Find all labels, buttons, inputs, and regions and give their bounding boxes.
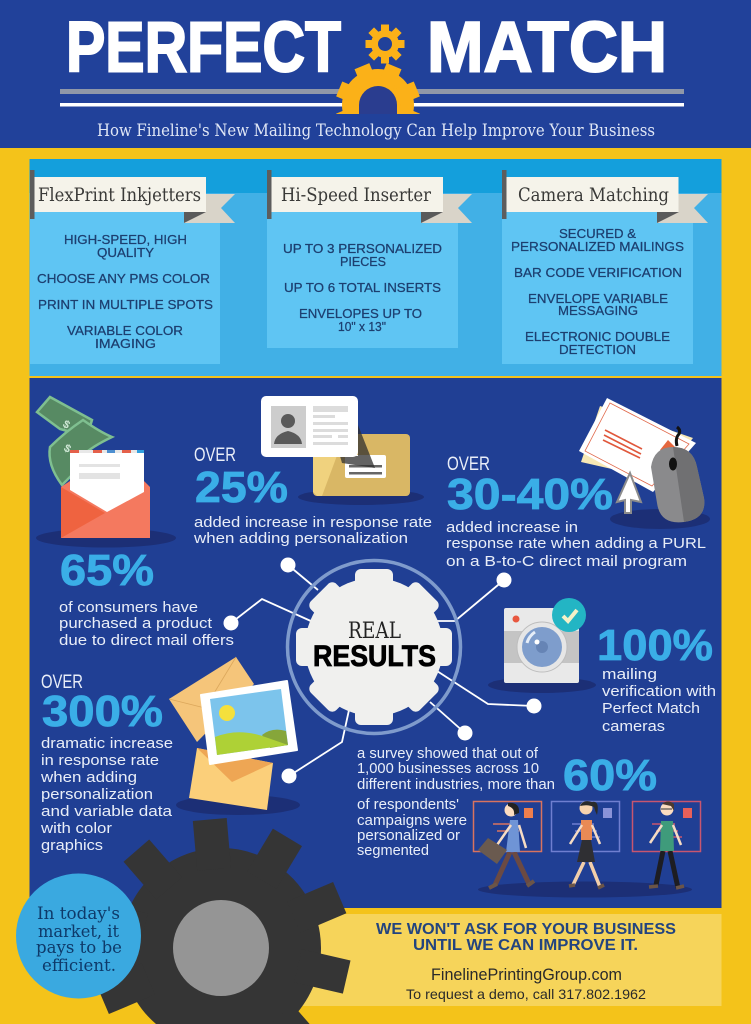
- stat: 30-40%: OVER: [447, 454, 490, 475]
- panel: Hi-Speed Inserter: 10" x 13": [338, 320, 386, 334]
- panel: Camera Matching: Camera Matching: [518, 185, 669, 206]
- central gear: real results: [288, 560, 460, 734]
- stat: 65%: [59, 546, 234, 649]
- stat: 65%: due to direct mail offers: [59, 632, 234, 649]
- panel: Hi-Speed Inserter: UP TO 6 TOTAL INSERTS: [284, 281, 441, 295]
- stat: 60% survey: different industries, more than: [357, 776, 555, 793]
- panel: FlexPrint Inkjetters: CHOOSE ANY PMS COLOR: [37, 272, 210, 286]
- stat: 30-40%: response rate when adding a PURL: [446, 535, 706, 552]
- stat: 60% survey: [357, 745, 657, 859]
- figure: man with glasses: [649, 802, 684, 888]
- figure: man with briefcase: [478, 803, 534, 888]
- stat: 60% survey: personalized or: [357, 827, 460, 844]
- callout: in today's market: pays to be: [36, 938, 122, 958]
- stat: 60% survey: 1,000 businesses across 10: [357, 760, 539, 777]
- panel: FlexPrint Inkjetters: IMAGING: [95, 337, 156, 351]
- stat: 60% survey: 60%: [563, 751, 657, 800]
- callout: call to action: To request a demo, call 317.802.1962: [406, 986, 646, 1002]
- figure: woman: [569, 801, 604, 888]
- stat: 25%: added increase in response rate: [194, 514, 432, 531]
- stat: 100%: cameras: [602, 718, 665, 735]
- stat: 300%: when adding: [40, 769, 137, 786]
- icon: personalized card and envelope: [261, 396, 424, 505]
- central gear: real results: RESULTS: [313, 640, 436, 673]
- callout: call to action: [300, 914, 722, 1006]
- stat: 60% survey: segmented: [357, 842, 429, 859]
- panel: Camera Matching: BAR CODE VERIFICATION: [514, 266, 682, 280]
- panel: real results: [30, 378, 722, 908]
- stat: 30-40%: 30-40%: [447, 470, 613, 519]
- panel: equipment: [30, 159, 722, 376]
- stat: 25%: when adding personalization: [193, 530, 408, 547]
- stat: 300%: in response rate: [41, 752, 159, 769]
- panel: Camera Matching: DETECTION: [559, 343, 636, 357]
- stat: 25%: OVER: [194, 445, 236, 466]
- stat: 300%: 300%: [42, 687, 163, 736]
- panel: Hi-Speed Inserter: UP TO 3 PERSONALIZED: [283, 242, 442, 256]
- illustration: three walking people: [474, 801, 700, 898]
- panel: Camera Matching: [502, 170, 708, 364]
- panel: Camera Matching: PERSONALIZED MAILINGS: [511, 240, 684, 254]
- stat: 100%: 100%: [597, 621, 713, 670]
- stat: 300%: graphics: [41, 837, 103, 854]
- icon: mailers and computer mouse: [579, 398, 710, 529]
- stat: 100%: Perfect Match: [602, 700, 700, 717]
- panel: Hi-Speed Inserter: PIECES: [340, 255, 386, 269]
- icon: large dark gear: [91, 818, 351, 1024]
- icon: envelopes and photo: [169, 657, 300, 815]
- stat: 25%: [193, 445, 432, 547]
- stat: 300%: and variable data: [41, 803, 173, 820]
- stat: 65%: 65%: [60, 546, 154, 595]
- stat: 60% survey: a survey showed that out of: [357, 745, 539, 762]
- connector lines: [224, 558, 542, 784]
- callout: call to action: UNTIL WE CAN IMPROVE IT.: [413, 937, 638, 954]
- stat: 300%: OVER: [41, 672, 83, 693]
- stat: 100%: [597, 621, 716, 735]
- stat: 300%: personalization: [41, 786, 153, 803]
- icon: envelope with money: $: [60, 418, 72, 432]
- panel: Hi-Speed Inserter: ENVELOPES UP TO: [299, 307, 422, 321]
- stat: 300%: with color: [40, 820, 112, 837]
- icon: camera with check: [488, 598, 596, 693]
- panel: FlexPrint Inkjetters: PRINT IN MULTIPLE SPOTS: [38, 298, 213, 312]
- stat: 60% survey: of respondents': [357, 796, 459, 813]
- icon: envelope with money: [36, 397, 176, 548]
- panel: Camera Matching: ENVELOPE VARIABLE: [528, 292, 668, 306]
- icon: envelope with money: $: [62, 442, 73, 456]
- panel: Camera Matching: SECURED &: [559, 227, 637, 241]
- panel: FlexPrint Inkjetters: HIGH-SPEED, HIGH: [64, 233, 187, 247]
- panel: Hi-Speed Inserter: [267, 170, 472, 348]
- stat: 65%: of consumers have: [59, 599, 198, 616]
- panel: FlexPrint Inkjetters: [30, 170, 235, 364]
- stat: 100%: mailing: [602, 666, 657, 683]
- stat: 60% survey: campaigns were: [357, 812, 467, 829]
- callout: in today's market: In today's: [37, 904, 120, 924]
- central gear: real results: REAL: [348, 619, 401, 644]
- stat: 100%: verification with: [602, 683, 716, 700]
- panel: Camera Matching: ELECTRONIC DOUBLE: [525, 330, 670, 344]
- panel: Hi-Speed Inserter: Hi-Speed Inserter: [281, 185, 431, 206]
- icon: small gear: [366, 24, 404, 64]
- panel: Camera Matching: MESSAGING: [558, 304, 638, 318]
- panel: FlexPrint Inkjetters: VARIABLE COLOR: [67, 324, 183, 338]
- stat: 30-40%: on a B-to-C direct mail program: [446, 553, 687, 570]
- title: PERFECT: [66, 8, 341, 88]
- title: [66, 8, 667, 88]
- panel: FlexPrint Inkjetters: FlexPrint Inkjetters: [38, 185, 201, 206]
- stat: 25%: 25%: [195, 463, 288, 512]
- icon: large half gear: [336, 63, 420, 114]
- subtitle: How Fineline's New Mailing Technology Can Help Improve Your Business: [97, 121, 655, 140]
- stat: 300%: dramatic increase: [41, 735, 173, 752]
- stat: 65%: purchased a product: [59, 615, 213, 632]
- stat: 30-40%: added increase in: [446, 519, 578, 536]
- callout: in today's market: efficient.: [42, 956, 116, 976]
- callout: in today's market: market, it: [38, 922, 119, 942]
- stat: 300%: [40, 672, 173, 854]
- callout: call to action: FinelinePrintingGroup.com: [431, 965, 622, 984]
- header banner: [0, 0, 751, 148]
- panel: FlexPrint Inkjetters: QUALITY: [97, 246, 155, 260]
- title: MATCH: [427, 8, 667, 88]
- stat: 30-40%: [446, 454, 706, 570]
- callout: call to action: WE WON'T ASK FOR YOUR BUSINESS: [376, 921, 676, 938]
- callout: in today's market: [16, 874, 141, 998]
